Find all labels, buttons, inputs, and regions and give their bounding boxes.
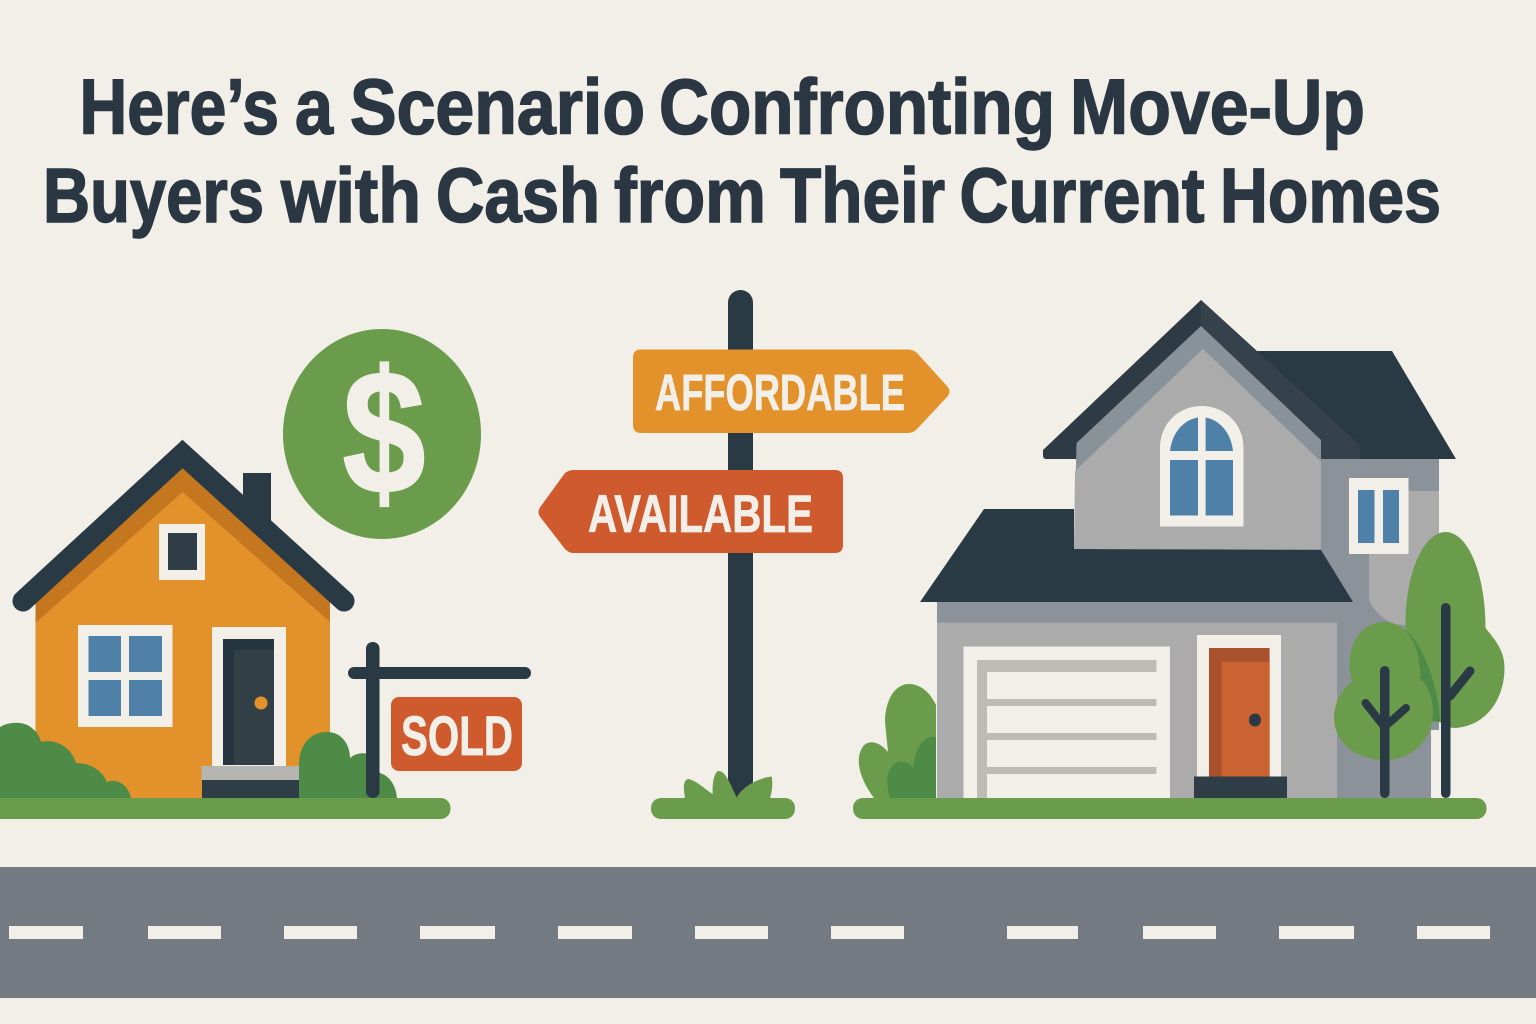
front door	[212, 627, 286, 767]
title: Cash	[436, 153, 600, 239]
center signpost	[538, 290, 950, 819]
tall tree	[1396, 532, 1504, 798]
icon: dollar coin	[283, 329, 481, 539]
front step	[1194, 776, 1287, 798]
gable wall	[1074, 326, 1321, 550]
small tree	[1334, 622, 1433, 798]
title: Confronting	[659, 62, 1055, 150]
affordable arrow sign: AFFORDABLE	[655, 364, 905, 421]
front window	[78, 625, 172, 727]
right bush	[299, 732, 397, 798]
right wall	[1321, 459, 1439, 798]
available arrow sign	[538, 470, 843, 553]
title: a	[295, 62, 334, 150]
chimney	[243, 473, 271, 533]
garage door	[964, 646, 1170, 798]
small house	[0, 454, 531, 819]
upper roof	[1043, 300, 1360, 459]
title: Scenario	[350, 62, 645, 150]
garage wall	[937, 602, 1337, 798]
lower roof	[920, 509, 1353, 602]
house body	[36, 466, 330, 798]
available arrow sign: AVAILABLE	[588, 485, 813, 544]
title: with	[280, 153, 421, 239]
base lawn	[651, 798, 795, 819]
title: Current	[960, 153, 1204, 239]
road lane dashes	[9, 926, 1490, 939]
front steps	[202, 766, 300, 798]
sold sign	[348, 642, 531, 798]
title: Homes	[1220, 153, 1441, 239]
shrub	[859, 684, 936, 798]
title: Move-Up	[1070, 62, 1365, 150]
grass tuft	[684, 771, 772, 799]
attic window	[159, 524, 205, 580]
arched window	[1160, 406, 1244, 526]
large house	[853, 300, 1504, 819]
title: Buyers	[43, 153, 264, 239]
left bushes	[0, 723, 131, 798]
title: Their	[780, 153, 945, 239]
road	[0, 867, 1536, 998]
title: Here’s	[80, 62, 279, 150]
affordable arrow sign	[633, 350, 950, 433]
front door	[1197, 635, 1281, 785]
lawn	[0, 798, 451, 819]
title	[43, 62, 1441, 239]
post	[728, 290, 753, 800]
right roof	[1255, 351, 1456, 459]
lawn	[853, 798, 1486, 819]
side window	[1349, 478, 1408, 554]
icon: dollar coin: $	[342, 335, 426, 531]
roof	[23, 454, 344, 601]
sold sign: SOLD	[401, 704, 513, 767]
title: from	[614, 153, 766, 239]
